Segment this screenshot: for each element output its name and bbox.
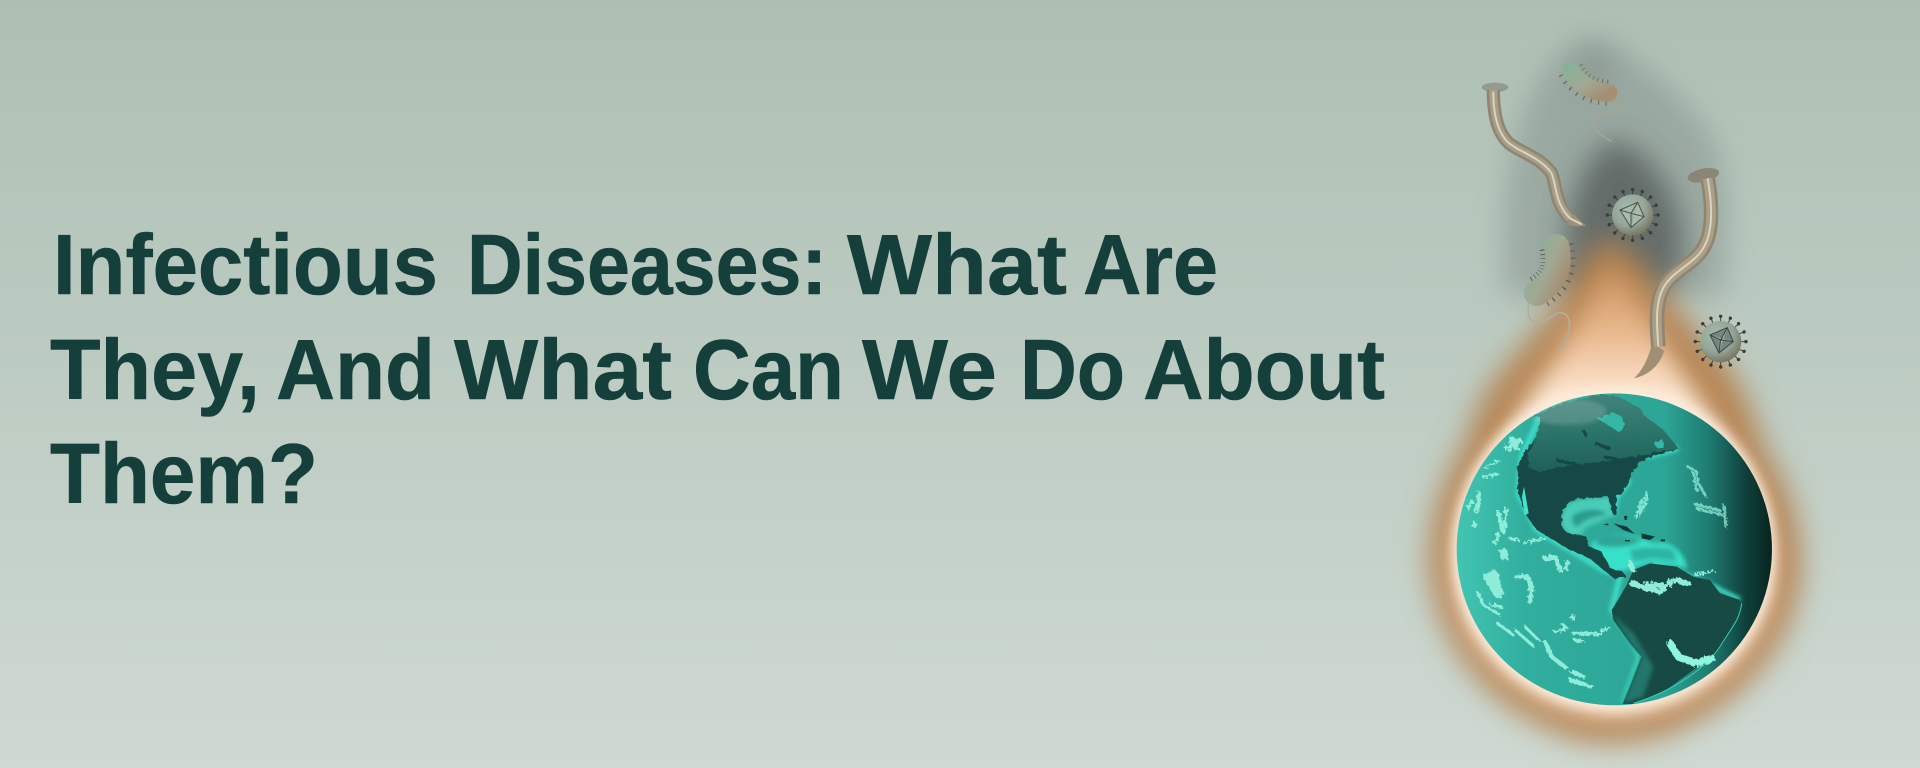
smoke plume <box>1503 40 1727 297</box>
Canada lighter band <box>1528 395 1678 472</box>
title: Do <box>1020 323 1125 418</box>
title: Can <box>693 323 844 418</box>
bacterium lower <box>1528 247 1570 352</box>
title: Infectious <box>53 218 438 313</box>
title: Are <box>1083 218 1218 313</box>
pathogens <box>1482 70 1747 378</box>
title: We <box>862 323 997 418</box>
gulf and caribbean shallows <box>1561 497 1687 573</box>
title: Diseases: <box>467 218 827 313</box>
worm left <box>1482 83 1587 226</box>
title: They, <box>50 323 260 418</box>
title <box>50 218 1385 522</box>
ocean sphere <box>1457 393 1772 705</box>
flame glow around globe <box>1430 238 1800 742</box>
title: And <box>276 323 435 418</box>
title: What <box>847 218 1067 313</box>
Hudson Bay and Great Lakes <box>1597 413 1664 449</box>
coastal glow <box>1518 417 1740 703</box>
virus centre <box>1606 188 1659 242</box>
South America <box>1612 563 1742 704</box>
clouds <box>1468 438 1726 687</box>
globe <box>1457 393 1772 705</box>
title: About <box>1143 323 1385 418</box>
virus right <box>1694 315 1747 368</box>
North America <box>1518 395 1678 579</box>
title: Them? <box>50 427 318 522</box>
sphere top-light shade <box>1527 398 1607 425</box>
Caribbean islands <box>1603 516 1665 541</box>
worm right <box>1634 165 1720 378</box>
baja strip <box>1522 487 1529 515</box>
bacterium top <box>1571 70 1621 142</box>
title: What <box>454 323 672 418</box>
